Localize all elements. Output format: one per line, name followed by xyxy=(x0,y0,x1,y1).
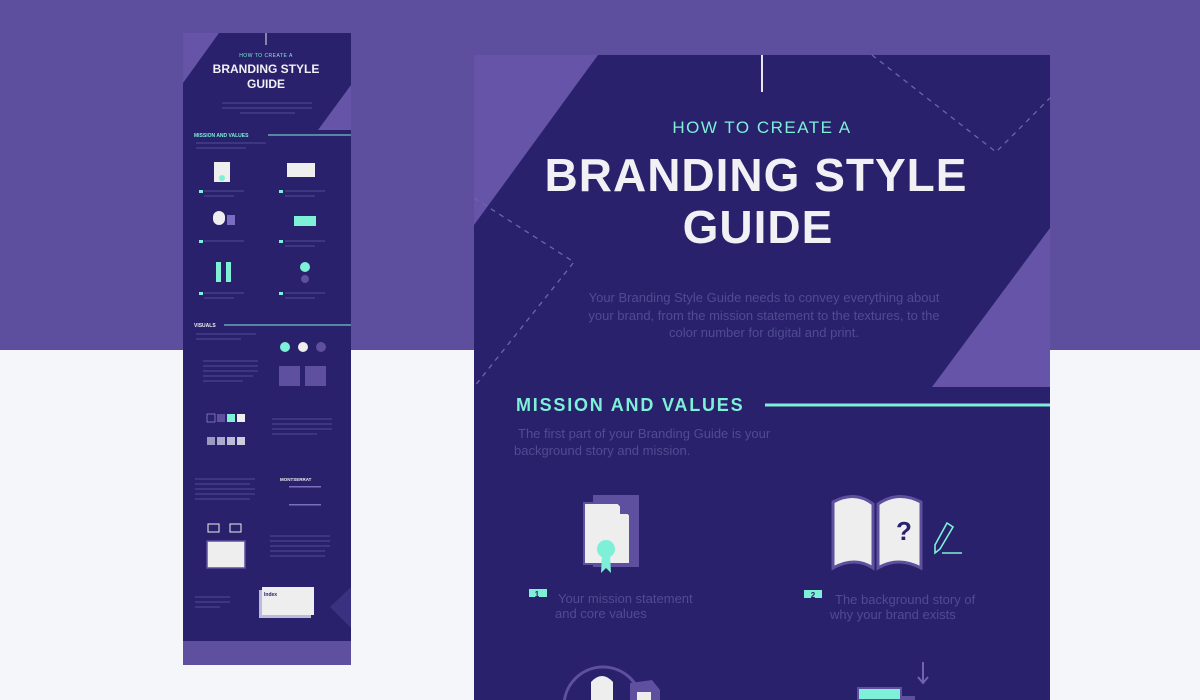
main infographic panel xyxy=(474,55,1050,700)
icon: book with question mark and pencil xyxy=(833,496,962,568)
thumbnail infographic: MISSION AND VALUES xyxy=(194,133,249,139)
item 2 text: why your brand exists xyxy=(829,607,956,622)
section heading: mission and values: MISSION AND VALUES xyxy=(516,395,744,415)
item 2 text xyxy=(804,590,976,622)
background band xyxy=(0,0,1200,350)
item 1 text: Your mission statement xyxy=(558,591,693,606)
intro text: color number for digital and print. xyxy=(669,325,859,340)
icon: blocks with arrow (partial) xyxy=(858,662,928,700)
thumbnail infographic: VISUALS xyxy=(194,323,216,329)
item 1 text: and core values xyxy=(555,606,647,621)
title: GUIDE xyxy=(683,201,833,253)
item 1 text: 1 xyxy=(535,590,540,599)
decorative triangle right xyxy=(932,228,1050,387)
thumbnail infographic: HOW TO CREATE A xyxy=(239,53,293,59)
title: BRANDING STYLE xyxy=(545,149,967,201)
section intro: The first part of your Branding Guide is your xyxy=(518,426,771,441)
thumbnail infographic: MONTSERRAT xyxy=(280,477,312,482)
thumbnail infographic: BRANDING STYLE xyxy=(213,62,319,76)
title xyxy=(545,149,967,253)
subtitle: HOW TO CREATE A xyxy=(672,118,852,137)
icon: book with question mark and pencil: ? xyxy=(896,516,912,546)
decorative triangle top-left xyxy=(474,55,598,225)
icon: document with seal xyxy=(584,495,639,573)
intro text xyxy=(588,290,940,340)
thumbnail infographic: GUIDE xyxy=(247,77,285,91)
thumbnail infographic: Index xyxy=(264,592,277,598)
section intro xyxy=(514,426,771,458)
icon: person portrait (partial) xyxy=(564,667,660,700)
item 2 text: The background story of xyxy=(835,592,976,607)
item 1 text xyxy=(529,589,693,621)
intro text: Your Branding Style Guide needs to convey everything about xyxy=(589,290,940,305)
item 2 text: 2 xyxy=(811,591,816,600)
thumbnail infographic xyxy=(183,33,351,665)
section intro: background story and mission. xyxy=(514,443,690,458)
intro text: your brand, from the mission statement to the textures, to the xyxy=(588,308,940,323)
